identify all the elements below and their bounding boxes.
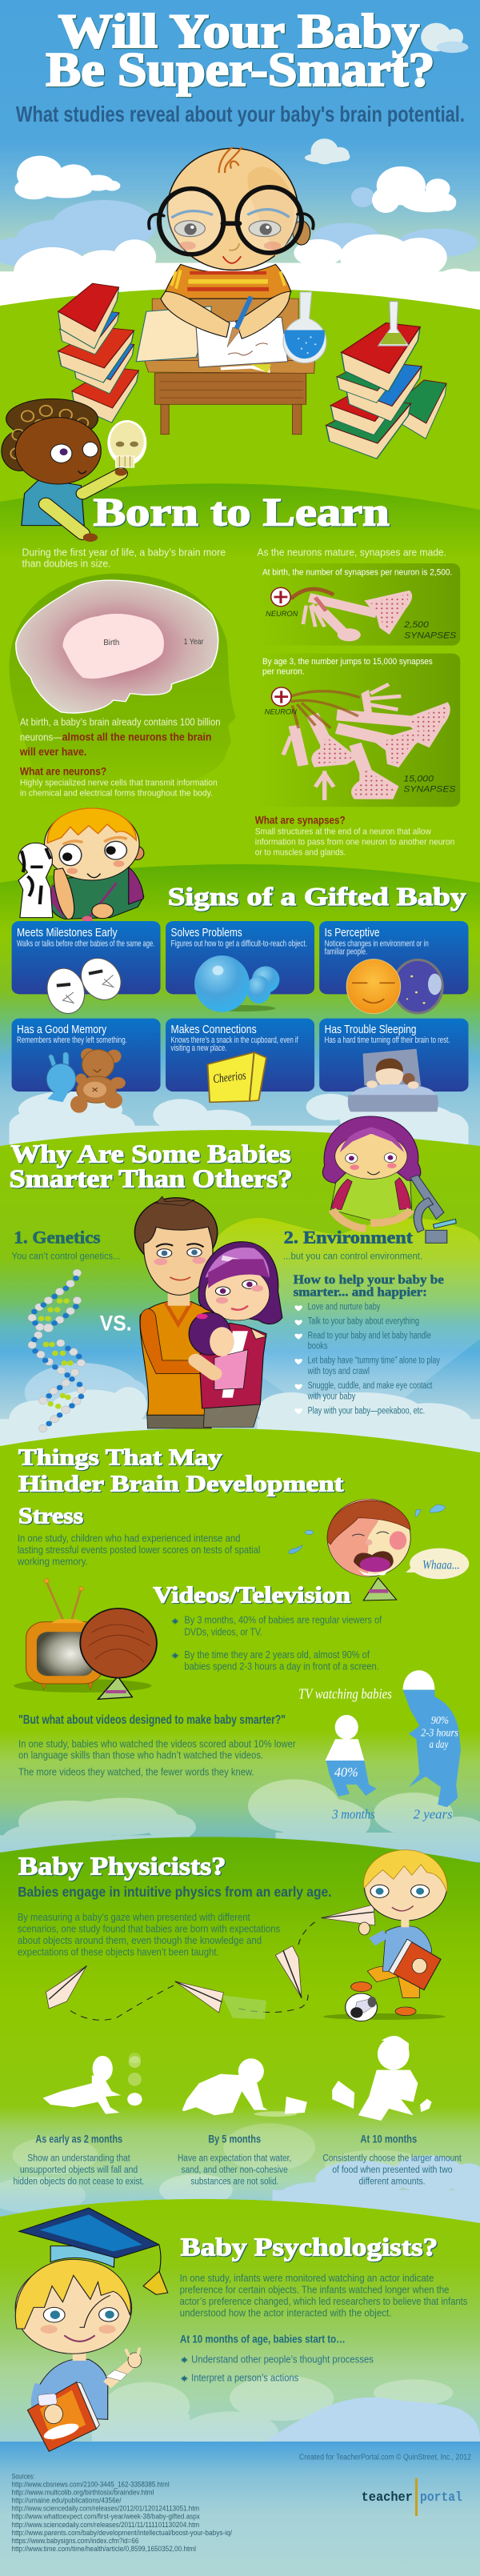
text: genetics: [12, 1228, 120, 1261]
text: stress: [17, 1502, 260, 1567]
section: footer: [12, 2453, 471, 2554]
subheading: intuitive physics: Babies engage in intuitive physics from an early age.: [18, 1884, 331, 1901]
text: 2 months: [13, 2153, 144, 2186]
card: has a good memory: Remembers where they left something.: [17, 1036, 127, 1045]
labels: ages: As early as 2 months: [35, 2133, 122, 2145]
text: gaze study: scenarios, one study found that babies are born with expectations: [18, 1923, 280, 1934]
card: has a good memory: [12, 1019, 161, 1092]
card: solves problems: Solves Problems: [171, 926, 242, 939]
illustration: paper plane flight path: [46, 1905, 375, 2020]
panel: synapses at birth: 2,500: [403, 619, 429, 630]
text: neurons: in chemical and electrical forms throughout the body.: [20, 787, 213, 798]
callout: whaaa speech bubble: [406, 1548, 469, 1579]
text: actor study: understood how the actor interacted with the object.: [180, 2307, 391, 2318]
illustration: blue flask: [283, 292, 326, 363]
list: ways to help your baby: [294, 1301, 440, 1416]
panel: synapses by age 3: NEURON: [265, 708, 298, 716]
text: 2 months: hidden objects do not cease to exist.: [13, 2175, 144, 2186]
labels: ages: [35, 2133, 417, 2145]
panel: synapses at birth: NEURON: [266, 611, 298, 619]
list: thought processes: Interpret a person’s actions: [191, 2372, 298, 2383]
heading: things that may hinder brain development: [18, 1444, 344, 1496]
illustration: family: [134, 1196, 282, 1428]
illustration: girl with skull: [2, 399, 146, 542]
text: videos designed to make baby smarter: on language skills than those who hadn’t watched the videos.: [18, 1749, 263, 1761]
chart: tv watching babies silhouettes: TV watching babies: [298, 1687, 392, 1702]
text: 5 months: Have an expectation that water,: [178, 2153, 291, 2163]
icon: cereal box: [207, 1052, 266, 1102]
labels: ages: At 10 months: [360, 2133, 417, 2145]
sources list: Sources:: [12, 2473, 34, 2481]
card: meets milestones early: Walks or talks before other babies of the same age.: [17, 939, 154, 948]
card: is perceptive: Is Perceptive: [325, 926, 380, 939]
sources list: http://www.multcolib.org/birthtosix/braindev.html: [12, 2489, 154, 2497]
text: videos designed to make baby smarter: The more videos they watched, the fewer words they knew.: [18, 1766, 254, 1777]
illustration: crawling baby at 2 months: [43, 2053, 142, 2114]
text: videos and television: By the time they are 2 years old, almost 90% of: [184, 1649, 370, 1661]
section: things that may hinder brain development: [14, 1444, 469, 1822]
text: 2 months: unsupported objects will fall and: [20, 2164, 138, 2175]
text: 5 months: [178, 2153, 291, 2186]
text: neurons: will ever have.: [19, 746, 86, 759]
card: meets milestones early: [12, 921, 161, 994]
list: thought processes: [180, 2354, 374, 2383]
icon: bunny and teddy bear: [46, 1048, 126, 1113]
text: stress: lasting stressful events posted lower scores on tests of spatial: [18, 1544, 260, 1556]
icon: baby shoes: [43, 953, 128, 1016]
text: videos designed to make baby smarter: "But what about videos designed to make baby smarter?": [18, 1713, 286, 1727]
sources list: http://umaine.edu/publications/4356e/: [12, 2497, 122, 2505]
text: how to help: How to help your baby be: [294, 1272, 444, 1287]
text: stress: Stress: [18, 1502, 83, 1528]
heading: why are some babies smarter than others: [9, 1140, 292, 1193]
head silhouette with brain: 1 Year: [184, 638, 204, 647]
card: has trouble sleeping: [319, 1019, 469, 1092]
text: videos and television: By 3 months, 40% of babies are regular viewers of: [184, 1614, 382, 1625]
sources list: http://www.cbsnews.com/2100-3445_162-3358385.html: [12, 2481, 170, 2489]
chart: tv watching babies silhouettes: a day: [430, 1739, 448, 1751]
card: makes connections: visiting a new place.: [171, 1044, 227, 1053]
text: environment: ...but you can control environment.: [283, 1250, 422, 1261]
text: videos and television: babies spend 2-3 hours a day in front of a screen.: [184, 1661, 379, 1672]
illustration: baby with glasses: [149, 147, 314, 347]
text: how to help: smarter... and happier:: [294, 1284, 427, 1299]
illustration: paper with scribbles: [196, 317, 288, 373]
chart: tv watching babies silhouettes: 40%: [334, 1765, 358, 1780]
text: 10 months: [322, 2153, 462, 2186]
chart: tv watching babies silhouettes: 2-3 hours: [421, 1727, 458, 1739]
card: is perceptive: [319, 921, 469, 994]
sources list: http://www.whattoexpect.com/first-year/week-38/baby-gifted.aspx: [12, 2513, 200, 2521]
text: synapses definition: What are synapses?: [255, 814, 346, 827]
heading: signs of a gifted baby: Signs of a Gifted Baby: [168, 883, 466, 911]
text: synapses definition: or to muscles and glands.: [255, 847, 346, 857]
text: at 10 months babies start to: At 10 months of age, babies start to…: [180, 2333, 346, 2346]
heading: why are some babies smarter than others: Smarter Than Others?: [9, 1164, 292, 1193]
card: meets milestones early: Meets Milestones Early: [17, 926, 118, 939]
illustration: left book stack: [58, 283, 138, 423]
panel: synapses by age 3: SYNAPSES: [403, 783, 455, 794]
text: neurons: neurons—: [20, 731, 62, 743]
text: neurons: almost all the neurons the brain: [62, 731, 211, 743]
icon: cereal box: Cheerios: [212, 1068, 247, 1086]
text: synapses intro: As the neurons mature, synapses are made.: [257, 547, 446, 558]
illustration: boy with graduation cap: [15, 2208, 168, 2451]
text: gaze study: [18, 1912, 280, 1957]
text: videos designed to make baby smarter: [18, 1713, 296, 1777]
section: why are some babies smarter: [9, 1116, 456, 1432]
text: synapses definition: Small structures at the end of a neuron that allow: [255, 826, 431, 836]
list: thought processes: Understand other people’s thought processes: [191, 2354, 374, 2365]
text: how to help: [294, 1272, 444, 1299]
text: brain intro: During the first year of life, a baby’s brain more: [22, 547, 226, 558]
icon: bubbles: [194, 955, 279, 1012]
card: is perceptive: familiar people.: [325, 947, 367, 956]
heading: baby psychologists: Baby Psychologists?: [181, 2233, 438, 2262]
heading: born to learn: Born to Learn: [94, 490, 390, 535]
text: neurons: [19, 716, 221, 798]
text: gaze study: By measuring a baby’s gaze when presented with different: [18, 1912, 250, 1923]
text: stress: working memory.: [17, 1556, 88, 1567]
text: videos and television: DVDs, videos, or TV.: [184, 1626, 262, 1637]
text: gaze study: about objects around them, even though the knowledge and: [18, 1935, 262, 1946]
heading: baby physicists: Baby Physicists?: [18, 1853, 226, 1881]
text: brain intro: than doubles in size.: [22, 559, 111, 569]
sources list: http://www.sciencedaily.com/releases/2011/11/111101130204.htm: [12, 2522, 199, 2530]
illustration: boy with statue: [18, 808, 144, 923]
text: neurons: What are neurons?: [20, 765, 106, 778]
card: solves problems: [166, 921, 314, 994]
heading: why are some babies smarter than others: Why Are Some Babies: [10, 1140, 291, 1168]
illustration: desk: [145, 298, 314, 435]
icon: sun and moon: [346, 959, 442, 1014]
section: age descriptions: [13, 2153, 468, 2451]
panel: synapses by age 3: By age 3, the number jumps to 15,000 synapses: [262, 656, 433, 667]
panel: synapses at birth: SYNAPSES: [404, 630, 456, 640]
chart: tv watching babies silhouettes: 2 years: [414, 1806, 453, 1822]
list: ways to help your baby: with your baby: [307, 1390, 356, 1401]
icon: baby in bed: [348, 1049, 438, 1112]
card: makes connections: [166, 1019, 314, 1092]
text: videos and television: [153, 1581, 382, 1672]
section: hero: [16, 6, 465, 459]
text: synapses definition: [255, 814, 454, 857]
card: makes connections: Makes Connections: [171, 1023, 257, 1036]
list: ways to help your baby: Love and nurture baby: [308, 1301, 381, 1312]
heading: things that may hinder brain development: Things That May: [18, 1444, 222, 1470]
card: has a good memory: Has a Good Memory: [17, 1023, 107, 1036]
head silhouette with brain: [9, 574, 236, 806]
callout: whaaa speech bubble: Whaaa...: [422, 1558, 460, 1572]
text: brain intro: [22, 547, 226, 569]
section: signs of a gifted baby: [12, 808, 469, 1113]
illustration: open book on desk: [136, 306, 211, 362]
text: neurons: Highly specialized nerve cells that transmit information: [20, 777, 218, 787]
text: environment: [283, 1228, 422, 1261]
card: has trouble sleeping: Has Trouble Sleeping: [325, 1023, 416, 1036]
heading: things that may hinder brain development: Hinder Brain Development: [18, 1470, 344, 1496]
title: Be Super-Smart?: [46, 44, 434, 97]
list: ways to help your baby: with toys and crawl: [307, 1365, 370, 1376]
panel: synapses by age 3: [257, 654, 460, 807]
sources list: [12, 2473, 232, 2554]
chart: tv watching babies silhouettes: 90%: [431, 1715, 449, 1727]
text: neurons: At birth, a baby’s brain already contains 100 billion: [20, 716, 221, 727]
text: 5 months: substances are not solid.: [190, 2175, 278, 2186]
panel: synapses by age 3: 15,000: [403, 773, 434, 783]
illustration: green flask: [378, 302, 409, 346]
text: videos and television: Videos/Television: [153, 1581, 350, 1608]
sources list: https://www.babysigns.com/index.cfm?id=66: [12, 2538, 138, 2546]
text: gaze study: expectations of these objects haven’t been taught.: [18, 1946, 219, 1957]
section: born to learn: [2, 399, 460, 857]
list: ways to help your baby: Talk to your baby about everything: [308, 1315, 419, 1326]
panel: synapses at birth: [257, 563, 460, 646]
text: 5 months: sand, and other non-cohesive: [182, 2164, 288, 2175]
chart: tv watching babies silhouettes: [298, 1670, 461, 1822]
text: 10 months: different amounts.: [359, 2175, 426, 2186]
text: genetics: 1. Genetics: [14, 1228, 101, 1248]
illustration: microscope: [410, 1175, 456, 1243]
logo: teacher portal: [362, 2478, 462, 2516]
illustration: tv with child: [14, 1579, 157, 1699]
card: solves problems: Figures out how to get a difficult-to-reach object.: [171, 939, 307, 948]
labels: ages: By 5 months: [208, 2133, 261, 2145]
illustration: crying baby: [289, 1499, 445, 1600]
text: environment: 2. Environment: [284, 1228, 413, 1248]
logo: teacher portal: portal: [420, 2490, 462, 2506]
text: actor study: [180, 2273, 468, 2318]
sources list: http://www.parents.com/baby/development/intellectual/boost-your-babys-iq/: [12, 2530, 232, 2538]
text: genetics: You can’t control genetics...: [12, 1250, 120, 1261]
title: Will Your Baby: [58, 6, 419, 58]
illustration: boy with ball and book: [323, 1850, 447, 2021]
head silhouette with brain: Birth: [103, 639, 119, 647]
chart: tv watching babies silhouettes: 3 months: [331, 1806, 375, 1822]
text: 2 months: Show an understanding that: [27, 2153, 130, 2163]
illustration: sitting baby at 10 months: [332, 2036, 432, 2121]
sources list: http://www.sciencedaily.com/releases/2012/01/120124113051.htm: [12, 2505, 199, 2513]
illustration: right book stack: [326, 323, 446, 459]
illustration: girl with microscope: [322, 1116, 421, 1228]
illustration: dna helix: [28, 1269, 86, 1432]
sources list: http://www.time.com/time/health/article/0,8599,1650352,00.html: [12, 2546, 196, 2554]
text: stress: In one study, children who had experienced intense and: [18, 1533, 240, 1544]
title: [46, 6, 434, 97]
text: versus: VS.: [100, 1312, 132, 1336]
section: baby physicists: [18, 1850, 447, 2145]
card: makes connections: Knows there’s a snack in the cupboard, even if: [171, 1036, 298, 1045]
text: videos designed to make baby smarter: In one study, babies who watched the videos scored about 10% lower: [18, 1738, 296, 1749]
panel: synapses by age 3: per neuron.: [262, 666, 305, 676]
illustration: crawling baby at 5 months: [182, 2058, 307, 2117]
list: ways to help your baby: books: [308, 1340, 327, 1351]
logo: teacher portal: teacher: [362, 2490, 413, 2506]
